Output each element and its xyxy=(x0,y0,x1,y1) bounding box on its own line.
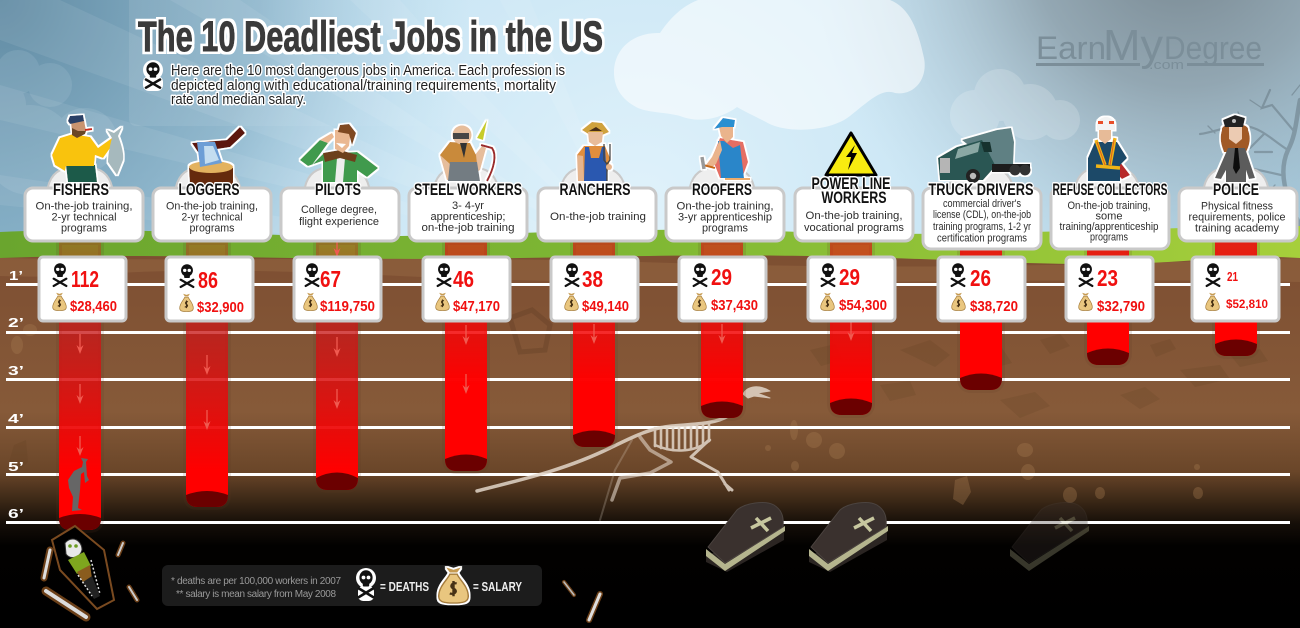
card: power line workers: POWER LINE xyxy=(812,174,890,193)
card: power line workers: On-the-job training, xyxy=(806,210,902,222)
stats: steel workers: $47,170 xyxy=(453,298,500,315)
card: truck drivers: commercial driver's xyxy=(943,198,1021,210)
card: refuse collectors: some xyxy=(1096,210,1122,222)
logo: EarnMyDegree.com: My xyxy=(1103,21,1163,70)
icon: roofer xyxy=(702,118,750,179)
icon: steel worker xyxy=(440,120,494,181)
stats: roofers xyxy=(679,257,766,321)
stats: police xyxy=(1192,257,1279,321)
card: pilots: College degree, xyxy=(301,204,377,216)
stats: loggers: 86 xyxy=(198,267,218,293)
stats: ranchers xyxy=(551,257,638,321)
card: steel workers: STEEL WORKERS xyxy=(414,180,522,199)
icon: police officer xyxy=(1215,115,1255,182)
stats: power line workers: $54,300 xyxy=(839,297,887,314)
card: truck drivers: TRUCK DRIVERS xyxy=(928,180,1034,199)
stats: ranchers: 38 xyxy=(582,266,603,292)
stats: steel workers: 46 xyxy=(453,266,474,292)
card: police: training academy xyxy=(1195,222,1279,234)
legend panel: = SALARY xyxy=(473,579,522,594)
card: police: requirements, police xyxy=(1188,212,1286,224)
logo: EarnMyDegree.com: Earn xyxy=(1036,30,1106,66)
stats: fishers: $28,460 xyxy=(70,298,117,315)
shaft: police xyxy=(1215,242,1257,356)
card: fishers: On-the-job training, xyxy=(36,200,132,212)
shaft: steel workers xyxy=(445,242,487,471)
coffin one xyxy=(706,503,785,572)
depth ruler lines and labels: 4’ xyxy=(8,411,24,426)
card: police xyxy=(1179,180,1297,241)
background clouds xyxy=(0,0,1080,195)
card: pilots: PILOTS xyxy=(315,180,361,199)
card: police: Physical fitness xyxy=(1201,200,1273,212)
legend panel: * deaths are per 100,000 workers in 2007 xyxy=(171,576,341,587)
card: loggers: LOGGERS xyxy=(178,180,240,199)
card: roofers xyxy=(666,180,784,241)
stats: roofers: 29 xyxy=(711,264,732,290)
card: pilots: flight experience xyxy=(299,216,379,228)
icon: axe in stump xyxy=(189,127,245,185)
stats: power line workers xyxy=(808,257,895,321)
card: truck drivers: license (CDL), on-the-job xyxy=(933,209,1031,221)
shaft: truck drivers xyxy=(960,242,1002,390)
stats: fishers: 112 xyxy=(71,266,99,292)
grass band xyxy=(0,226,1300,275)
card: roofers: ROOFERS xyxy=(692,180,752,199)
logo: EarnMyDegree.com: .com xyxy=(1149,57,1184,72)
dinosaur skeleton xyxy=(477,387,770,520)
scattered bones xyxy=(44,543,600,620)
card: truck drivers: training programs, 1-2 yr xyxy=(933,221,1031,233)
shaft: fishers 6 feet xyxy=(59,242,101,530)
card: truck drivers: certification programs xyxy=(937,232,1027,244)
card: refuse collectors: On-the-job training, xyxy=(1068,200,1150,212)
shaft: roofers xyxy=(701,242,743,418)
icon: refuse collector xyxy=(1088,117,1130,181)
card: steel workers: 3- 4-yr xyxy=(452,200,484,212)
depth ruler lines and labels: 1’ xyxy=(9,268,23,283)
title panel backdrop xyxy=(129,0,560,126)
stats: truck drivers: $38,720 xyxy=(970,298,1018,315)
card: police: POLICE xyxy=(1213,180,1259,199)
legend panel: = DEATHS xyxy=(380,579,429,594)
coffin two xyxy=(809,503,888,572)
stats: police: $52,810 xyxy=(1226,297,1268,311)
icon: truck xyxy=(938,128,1030,183)
stats: refuse collectors: $32,790 xyxy=(1097,298,1145,315)
shaft: ranchers xyxy=(573,242,615,447)
card: loggers: programs xyxy=(190,222,235,234)
card: loggers: 2-yr technical xyxy=(182,212,242,224)
card: fishers xyxy=(25,180,143,241)
card: ranchers: RANCHERS xyxy=(560,180,630,199)
stats: refuse collectors: 23 xyxy=(1097,265,1118,291)
card: steel workers xyxy=(409,180,527,241)
card: roofers: programs xyxy=(702,222,748,234)
card: fishers: programs xyxy=(61,222,107,234)
stats: fishers xyxy=(39,257,126,321)
depth ruler lines and labels xyxy=(6,268,1290,524)
legend bag icon xyxy=(439,567,468,603)
card: pilots xyxy=(281,180,399,241)
card: ranchers xyxy=(538,180,656,241)
stats: loggers: $32,900 xyxy=(197,299,244,316)
logo: EarnMyDegree.com xyxy=(1036,21,1264,72)
stats: ranchers: $49,140 xyxy=(582,298,629,315)
coffin three faded xyxy=(1010,503,1089,571)
stats: loggers xyxy=(166,257,253,321)
card: ranchers: On-the-job training xyxy=(550,211,646,223)
stats: power line workers: 29 xyxy=(839,264,860,290)
card: power line workers: WORKERS xyxy=(822,188,886,207)
depth ruler lines and labels: 6’ xyxy=(8,506,24,521)
sky background xyxy=(0,0,1300,270)
stats: pilots: 67 xyxy=(320,266,341,292)
intro text: rate and median salary. xyxy=(171,92,306,108)
title: The 10 Deadliest Jobs in the US xyxy=(138,13,603,61)
dome shadows behind figures xyxy=(47,168,1269,192)
logo: EarnMyDegree.com: Degree xyxy=(1164,30,1262,66)
depth ruler lines and labels: 2’ xyxy=(8,315,24,330)
stats: truck drivers: 26 xyxy=(970,265,991,291)
stats: roofers: $37,430 xyxy=(711,297,758,314)
soil background xyxy=(0,255,1300,628)
card: roofers: 3-yr apprenticeship xyxy=(678,212,772,224)
card: refuse collectors: programs xyxy=(1090,232,1128,244)
card: steel workers: apprenticeship; xyxy=(430,211,506,223)
icon: fisher xyxy=(52,115,123,182)
shaft: loggers 5 feet xyxy=(186,242,228,507)
icon: pilot xyxy=(300,124,378,182)
icon: high voltage sign xyxy=(826,133,876,175)
card: refuse collectors: REFUSE COLLECTORS xyxy=(1052,180,1168,199)
shaft: power line workers xyxy=(830,242,872,415)
digger silhouette xyxy=(68,458,89,511)
stats: steel workers xyxy=(423,257,510,321)
intro skull icon xyxy=(143,60,163,91)
tree silhouette xyxy=(1200,85,1300,225)
card: power line workers xyxy=(795,174,913,241)
intro text: Here are the 10 most dangerous jobs in America. Each profession is xyxy=(171,63,565,79)
card: power line workers: vocational programs xyxy=(804,222,904,234)
stats: refuse collectors xyxy=(1066,257,1153,321)
card: fishers: 2-yr technical xyxy=(52,212,116,224)
stats: truck drivers xyxy=(938,257,1025,321)
card: refuse collectors xyxy=(1051,180,1169,249)
icon: rancher xyxy=(577,122,612,181)
shaft: refuse collectors xyxy=(1087,242,1129,365)
stats: pilots: $119,750 xyxy=(320,298,375,315)
soil texture and rocks xyxy=(9,310,1268,472)
card: loggers: On-the-job training, xyxy=(166,200,258,212)
shaft: pilots xyxy=(316,237,358,490)
coffin with skeleton xyxy=(52,526,114,609)
legend skull icon xyxy=(356,568,376,601)
stats: police: 21 xyxy=(1227,269,1238,284)
intro text xyxy=(171,63,565,108)
depth ruler lines and labels: 3’ xyxy=(8,363,24,378)
card: loggers xyxy=(153,180,271,241)
stats: pilots xyxy=(294,257,381,321)
card: fishers: FISHERS xyxy=(53,180,109,199)
card: refuse collectors: training/apprenticeship xyxy=(1060,221,1158,233)
card: truck drivers xyxy=(923,180,1041,249)
depth ruler lines and labels: 5’ xyxy=(8,459,24,474)
legend panel xyxy=(162,565,542,606)
intro text: depicted along with educational/training requirements, mortality xyxy=(171,78,557,94)
card: roofers: On-the-job training, xyxy=(676,200,774,212)
legend panel: ** salary is mean salary from May 2008 xyxy=(176,589,336,600)
card: steel workers: on-the-job training xyxy=(422,222,514,234)
